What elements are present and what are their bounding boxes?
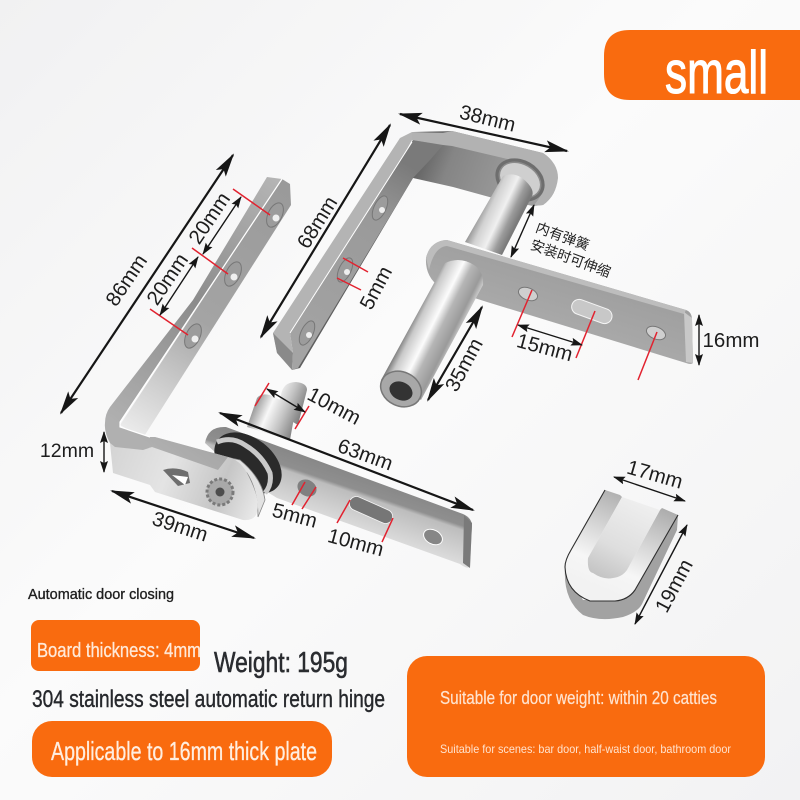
dimension: 5mm arm hole: 5mm	[355, 262, 397, 313]
text: automatic door closing: Automatic door closing	[28, 586, 174, 603]
dimension: 10mm slot: 10mm	[325, 524, 386, 561]
cover side shadow	[565, 515, 678, 619]
piston nut	[375, 365, 427, 413]
bracket long arm face	[120, 179, 291, 438]
screw	[163, 468, 190, 486]
cover inner slot	[588, 497, 660, 578]
dimension: 35mm	[428, 307, 488, 400]
dimension: 39mm	[112, 491, 254, 547]
dimension: 20mm lower: 20mm	[142, 249, 193, 309]
dimension: 12mm	[40, 432, 104, 472]
right plate	[426, 240, 693, 364]
arm end chamfer	[273, 333, 293, 370]
dimension: 86mm	[61, 155, 233, 413]
long arm holes	[181, 200, 287, 351]
short bracket inner surface	[292, 131, 557, 370]
red measuring lines	[150, 189, 657, 542]
collar	[487, 150, 553, 210]
dimension: 5mm plate hole: 5mm	[270, 499, 320, 533]
scenes text: Suitable for scenes: bar door, half-waist door, bathroom door	[440, 742, 731, 756]
upper piston cylinder	[465, 174, 533, 255]
hinge: long bracket with lower pivot plate	[105, 177, 472, 568]
dimension: 68mm: 68mm	[293, 192, 342, 253]
short arm wall	[273, 132, 412, 353]
note: spring inside	[511, 205, 613, 280]
panel: suitability	[407, 656, 765, 777]
hinge: short bracket with upper plate and piston	[273, 131, 693, 413]
dimension: 39mm: 39mm	[149, 507, 211, 547]
star bolt	[207, 479, 233, 505]
white edge line	[120, 179, 282, 437]
lower pivot pin	[247, 382, 307, 440]
dimension: 20mm upper: 20mm	[184, 188, 235, 248]
dimension: 10mm pin	[267, 383, 365, 430]
cover front	[565, 490, 678, 601]
dimension: 38mm	[400, 101, 567, 151]
cover outline	[565, 490, 678, 601]
dimension: 12mm: 12mm	[40, 440, 94, 462]
top rim	[412, 131, 558, 206]
dimension: 35mm: 35mm	[441, 334, 488, 395]
short arm face	[290, 140, 443, 370]
dimension: 17mm: 17mm	[624, 456, 685, 494]
U-shaped cover	[565, 490, 678, 619]
dimension: 38mm: 38mm	[457, 101, 518, 137]
pivot washers	[203, 420, 293, 517]
dimension: 86mm: 86mm	[101, 250, 152, 310]
dimension: 15mm: 15mm	[514, 329, 575, 366]
door weight text: Suitable for door weight: within 20 catties	[440, 688, 717, 708]
short arm holes	[296, 194, 391, 347]
bracket front face	[110, 437, 258, 520]
lower piston cylinder	[381, 260, 483, 400]
badge: board thickness	[31, 620, 201, 671]
badge: board thickness: Board thickness: 4mm	[37, 640, 201, 662]
note: spring inside: 安装时可伸缩	[529, 236, 613, 280]
dimension: 19mm	[635, 525, 698, 624]
lower plate	[205, 427, 472, 568]
bracket long arm wall	[105, 177, 282, 470]
dimension: 63mm	[220, 413, 473, 510]
banner: small	[604, 30, 800, 106]
text: product name: 304 stainless steel automatic return hinge	[32, 686, 385, 713]
text: weight: Weight: 195g	[214, 647, 348, 679]
badge: applicable plate: Applicable to 16mm thick plate	[51, 736, 317, 766]
note: spring inside: 内有弹簧	[534, 219, 592, 253]
dimension: 63mm: 63mm	[335, 434, 396, 475]
dimension: 16mm	[699, 315, 759, 365]
dimension: 10mm pin: 10mm	[304, 383, 365, 430]
dimension: 19mm: 19mm	[651, 555, 698, 616]
dimension: 68mm	[261, 125, 390, 337]
dimension: 16mm: 16mm	[703, 329, 759, 352]
badge: applicable plate	[32, 721, 332, 777]
white edge line	[290, 142, 412, 333]
